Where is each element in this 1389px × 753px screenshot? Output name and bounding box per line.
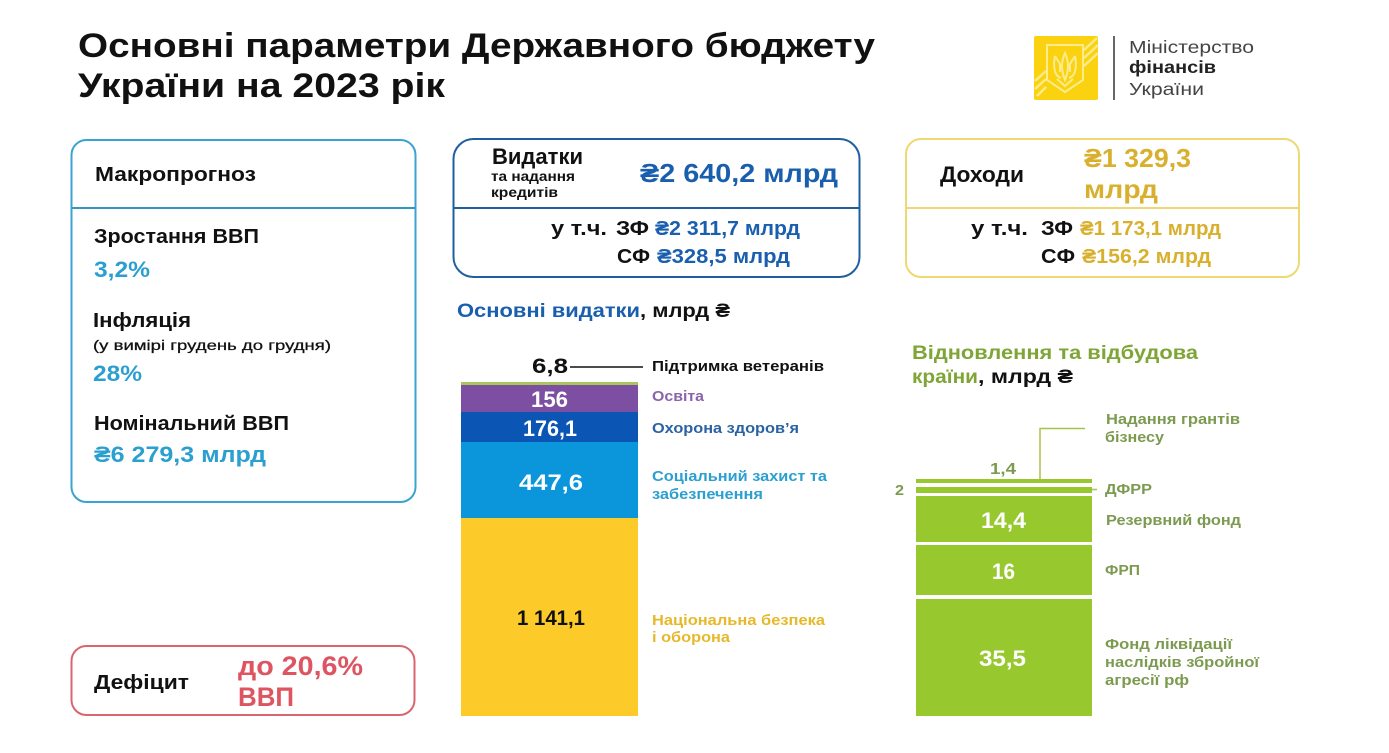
expenditures breakdown: у т.ч. — [551, 218, 607, 240]
segment: aggression consequences fund — [916, 599, 1260, 716]
segment: healthcare: Охорона здоров’я — [652, 421, 799, 437]
total expenditures: ₴2 640,2 млрд — [640, 158, 839, 188]
heading: expenditures: кредитів — [491, 185, 558, 200]
revenues breakdown: у т.ч. — [971, 218, 1028, 240]
segment: DFRR: 2 — [895, 483, 904, 499]
nominal GDP: ₴6 279,3 млрд — [94, 442, 266, 467]
title — [78, 27, 875, 105]
heading: main expenditures: Основні видатки — [457, 301, 640, 322]
segment: business grants: 1,4 — [990, 461, 1016, 478]
segment: business grants — [916, 412, 1240, 483]
inflation: 28% — [93, 361, 142, 386]
inflation: (у вимірі грудень до грудня) — [93, 338, 331, 353]
title: Основні параметри Державного бюджету — [78, 27, 875, 65]
logo: Ministry of Finance: фінансів — [1129, 57, 1216, 77]
segment: social protection: 447,6 — [519, 470, 583, 495]
heading: recovery and reconstruction — [912, 342, 1198, 388]
logo: Ministry of Finance: України — [1129, 79, 1204, 99]
expenditures breakdown: ₴328,5 млрд — [657, 246, 790, 268]
heading: expenditures: та надання — [491, 169, 575, 184]
segment: national security and defence — [461, 518, 826, 716]
panel: deficit — [72, 646, 414, 715]
icon: yellow emblem with trident — [1034, 36, 1098, 100]
panel: deficit: до 20,6% — [238, 651, 363, 681]
GDP growth: 3,2% — [94, 257, 150, 282]
segment: education — [461, 385, 705, 412]
revenues breakdown — [971, 218, 1221, 268]
heading: recovery and reconstruction: Відновлення та відбудова — [912, 342, 1198, 364]
total revenues: млрд — [1084, 174, 1159, 204]
segment: social protection — [461, 442, 828, 518]
expenditures breakdown: ₴2 311,7 млрд — [655, 218, 800, 240]
segment: aggression consequences fund: агресії рф — [1105, 673, 1189, 689]
heading: main expenditures — [457, 301, 730, 322]
segment: reserve fund: 14,4 — [981, 508, 1027, 533]
GDP growth: Зростання ВВП — [94, 226, 259, 248]
title: України на 2023 рік — [78, 67, 446, 105]
segment: regional development fund: 16 — [992, 559, 1015, 584]
chart: recovery stacked bar — [895, 412, 1260, 716]
heading: recovery and reconstruction: країни — [912, 366, 978, 388]
logo: Ministry of Finance — [1034, 36, 1254, 100]
segment: business grants: Надання грантів — [1106, 412, 1240, 428]
revenues breakdown: ₴156,2 млрд — [1082, 246, 1211, 268]
segment: social protection: Соціальний захист та — [652, 469, 828, 485]
segment: healthcare: 176,1 — [523, 416, 577, 441]
nominal GDP: Номінальний ВВП — [94, 413, 289, 435]
inflation — [93, 310, 331, 386]
chart: main expenditures stacked bar — [461, 355, 828, 716]
segment: aggression consequences fund: наслідків збройної — [1105, 655, 1260, 671]
panel: deficit: Дефіцит — [94, 671, 189, 694]
revenues breakdown: СФ — [1041, 246, 1075, 268]
expenditures breakdown — [551, 218, 800, 268]
segment: veterans support — [461, 355, 824, 385]
segment: national security and defence: і оборона — [652, 630, 731, 646]
total revenues — [1084, 143, 1191, 204]
revenues breakdown: ЗФ — [1041, 218, 1073, 240]
logo: Ministry of Finance: Міністерство — [1129, 37, 1254, 57]
segment: veterans support: Підтримка ветеранів — [652, 359, 824, 375]
heading: expenditures — [491, 144, 583, 200]
segment: regional development fund: ФРП — [1105, 563, 1140, 579]
total revenues: ₴1 329,3 — [1084, 143, 1191, 173]
segment: DFRR — [895, 482, 1152, 499]
panel: deficit: ВВП — [238, 682, 294, 712]
heading: revenues: Доходи — [940, 162, 1024, 187]
segment: national security and defence: Національна безпека — [652, 613, 826, 629]
inflation: Інфляція — [93, 310, 191, 332]
nominal GDP — [94, 413, 289, 467]
expenditures breakdown: ЗФ — [616, 218, 649, 240]
segment: business grants: бізнесу — [1105, 430, 1164, 446]
panel: revenues — [906, 139, 1299, 277]
heading: macro forecast: Макропрогноз — [95, 164, 256, 186]
segment: aggression consequences fund: 35,5 — [979, 646, 1026, 671]
segment: regional development fund — [916, 545, 1140, 595]
segment: veterans support: 6,8 — [532, 355, 568, 378]
segment: DFRR: ДФРР — [1105, 482, 1152, 498]
revenues breakdown: ₴1 173,1 млрд — [1080, 218, 1221, 240]
segment: education: 156 — [531, 387, 568, 412]
segment: reserve fund — [916, 496, 1241, 542]
segment: aggression consequences fund: Фонд ліквідації — [1105, 637, 1233, 653]
GDP growth — [94, 226, 259, 282]
heading: expenditures: Видатки — [492, 144, 583, 169]
segment: education: Освіта — [652, 389, 705, 405]
expenditures breakdown: СФ — [617, 246, 650, 268]
heading: recovery and reconstruction: , млрд ₴ — [978, 366, 1073, 388]
segment: reserve fund: Резервний фонд — [1106, 513, 1241, 529]
segment: healthcare — [461, 412, 799, 442]
panel: expenditures — [454, 139, 860, 277]
panel: macro forecast — [72, 140, 416, 502]
segment: national security and defence: 1 141,1 — [517, 607, 585, 630]
segment: social protection: забезпечення — [652, 487, 763, 503]
heading: main expenditures: , млрд ₴ — [640, 301, 730, 322]
